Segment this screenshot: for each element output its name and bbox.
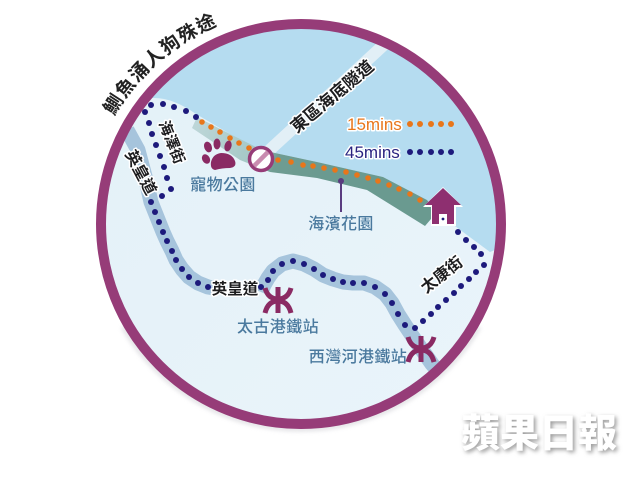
marker: waterfront garden pointer <box>338 178 344 212</box>
label: Tai Koo station: 太古港鐵站 <box>237 318 319 336</box>
map disc <box>106 29 496 419</box>
land <box>106 98 494 419</box>
watermark: Apple Daily: 蘋果日報 <box>461 413 617 456</box>
label: pet park: 寵物公園 <box>190 175 256 194</box>
outer purple ring <box>101 24 501 424</box>
waterfront garden green band <box>192 117 437 226</box>
icon: MTR logo Sai Wan Ho <box>408 336 434 362</box>
navy 45-minute route dots <box>142 101 487 331</box>
icon: MTR logo Tai Koo <box>265 287 291 313</box>
label: waterfront garden: 海濱花園 <box>308 214 374 233</box>
icon: paw print <box>200 138 235 170</box>
road band: Tai Koo to Sai Wan Ho section <box>261 261 442 376</box>
legend: 45 minutes <box>345 143 454 162</box>
label: King's Road rotated: 英皇道 <box>121 147 161 198</box>
outer ring shadow <box>123 327 479 429</box>
road band: King's Road west section <box>127 130 214 288</box>
legend: 15 minutes: 15mins <box>347 115 402 134</box>
label: Sai Wan Ho station: 西灣河港鐵站 <box>309 348 407 366</box>
icon: no entry sign <box>250 148 272 170</box>
label: King's Road horizontal: 英皇道 <box>212 280 259 298</box>
orange 15-minute route dots <box>199 119 423 203</box>
title on arc: 鰂魚涌人狗殊途 <box>102 14 217 116</box>
legend: 15 minutes <box>347 115 454 134</box>
icon: house <box>423 187 463 226</box>
label: Hoi Chak Street: 海澤街 <box>155 118 188 166</box>
label: Eastern Harbour Crossing: 東區海底隧道 <box>287 56 378 137</box>
harbour water <box>152 29 496 252</box>
eastern harbour tunnel road <box>264 44 388 153</box>
legend: 45 minutes: 45mins <box>345 143 400 162</box>
label: Tai Hong Street: 太康街 <box>417 252 466 297</box>
